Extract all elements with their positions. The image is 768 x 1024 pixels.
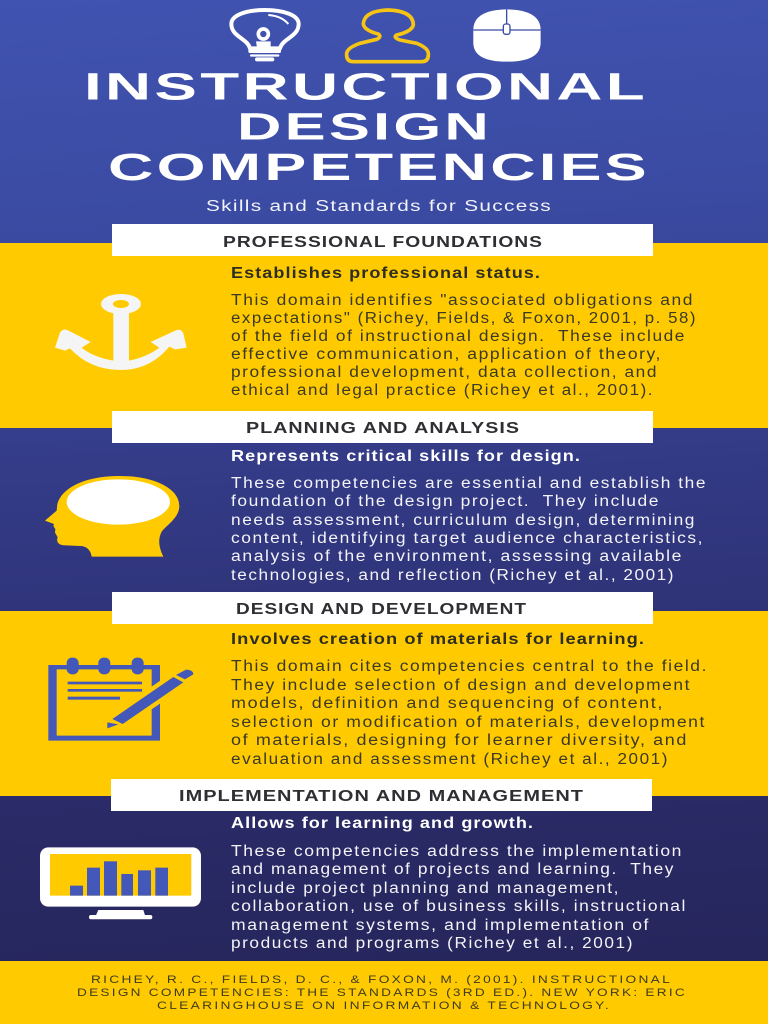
icon: monitor with bar chart: [40, 847, 201, 919]
panel: design and development: [0, 592, 768, 796]
body text: They include selection of design and development: [231, 677, 691, 694]
body text: ethical and legal practice (Richey et al., 2001).: [231, 382, 654, 399]
body text: of materials, designing for learner diversity, and: [231, 732, 688, 749]
heading bar: design and development: DESIGN AND DEVELOPMENT: [236, 601, 527, 618]
body text: [231, 475, 707, 584]
title: INSTRUCTIONAL: [84, 66, 648, 108]
body text: management systems, and implementation of: [231, 917, 650, 934]
footer: citation: [0, 961, 768, 1024]
icon: computer mouse: [473, 9, 541, 62]
lead sentence: Involves creation of materials for learning.: [231, 631, 645, 648]
footer: citation: CLEARINGHOUSE ON INFORMATION & TECHNOLOGY.: [157, 1000, 611, 1012]
heading bar: implementation and management: IMPLEMENTATION AND MANAGEMENT: [179, 788, 584, 805]
heading bar: design and development: [112, 592, 653, 624]
body text: and management of projects and learning. They: [231, 861, 675, 878]
heading bar: professional foundations: [112, 224, 653, 256]
body text: This domain cites competencies central to the field.: [231, 658, 708, 675]
body text: [231, 658, 708, 768]
body text: These competencies are essential and establish the: [231, 475, 707, 492]
body text: [231, 292, 697, 399]
body text: This domain identifies "associated obligations and: [231, 292, 694, 309]
body text: selection or modification of materials, development: [231, 714, 706, 731]
icon: light bulb: [231, 10, 299, 61]
footer: citation: DESIGN COMPETENCIES: THE STANDARDS (3RD ED.). NEW YORK: ERIC: [77, 987, 687, 999]
panel: professional foundations: [0, 224, 768, 428]
lead sentence: Represents critical skills for design.: [231, 448, 581, 465]
title: COMPETENCIES: [108, 147, 650, 189]
icon: anchor: [55, 294, 187, 370]
body text: evaluation and assessment (Richey et al., 2001): [231, 751, 669, 768]
body text: include project planning and management,: [231, 880, 620, 897]
body text: These competencies address the implementation: [231, 843, 683, 860]
body text: needs assessment, curriculum design, determining: [231, 512, 696, 529]
panel: implementation and management: [40, 779, 687, 952]
subtitle: Skills and Standards for Success: [206, 198, 552, 215]
panel: planning and analysis: [45, 411, 707, 584]
body text: expectations" (Richey, Fields, & Foxon, 2001, p. 58): [231, 310, 697, 327]
footer: citation: RICHEY, R. C., FIELDS, D. C., & FOXON, M. (2001). INSTRUCTIONAL: [91, 974, 672, 986]
title: [84, 66, 650, 189]
body text: models, definition and sequencing of content,: [231, 695, 664, 712]
body text: products and programs (Richey et al., 2001): [231, 935, 634, 952]
icon: person outline: [347, 10, 428, 62]
lead sentence: Establishes professional status.: [231, 265, 541, 282]
heading bar: professional foundations: PROFESSIONAL FOUNDATIONS: [223, 234, 543, 251]
heading bar: implementation and management: [111, 779, 652, 811]
body text: analysis of the environment, assessing available: [231, 548, 683, 565]
body text: effective communication, application of theory,: [231, 346, 662, 363]
heading bar: planning and analysis: [112, 411, 653, 443]
body text: [231, 843, 687, 952]
body text: technologies, and reflection (Richey et al., 2001): [231, 567, 675, 584]
heading bar: planning and analysis: PLANNING AND ANALYSIS: [246, 420, 520, 437]
icon: head silhouette: [45, 476, 179, 557]
lead sentence: Allows for learning and growth.: [231, 815, 534, 832]
icon row: [231, 9, 541, 62]
body text: of the field of instructional design. These include: [231, 328, 686, 345]
icon: notepad and pencil: [48, 658, 193, 741]
body text: professional development, data collection, and: [231, 364, 658, 381]
body text: foundation of the design project. They include: [231, 493, 660, 510]
title: DESIGN: [237, 106, 492, 148]
body text: collaboration, use of business skills, instructional: [231, 898, 687, 915]
body text: content, identifying target audience characteristics,: [231, 530, 704, 547]
